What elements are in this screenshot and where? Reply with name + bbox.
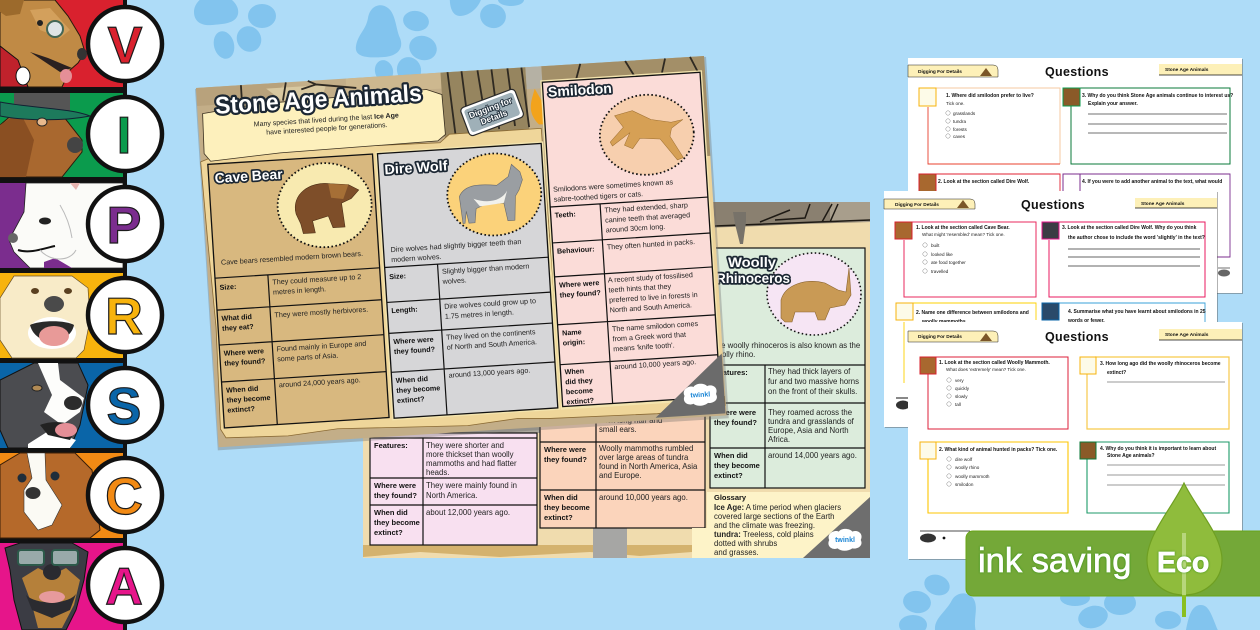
question 1 box: 1. Where did smilodon prefer to live? <box>946 93 1034 99</box>
panel: Smilodon: around 10,000 years ago. <box>614 357 696 371</box>
badge C <box>88 458 162 532</box>
panel: Smilodon: from a Greek word that <box>612 330 686 343</box>
panel: mammoth relative table: they become <box>374 518 420 527</box>
panel: Cave Bear: They could measure up to 2 <box>272 272 362 287</box>
panel: Dire Wolf: wolves. <box>441 275 467 286</box>
question 1 box: What does 'extremely' mean? Tick one. <box>946 367 1026 372</box>
panel: woolly mammoth table: and Europe. <box>599 471 641 480</box>
panel: Dire Wolf: Slightly bigger than modern <box>442 261 530 276</box>
worksheet 3 <box>908 322 1243 560</box>
dog P: white dog on purple <box>0 183 123 268</box>
panel: mammoth relative table: about 12,000 years ago. <box>426 508 510 517</box>
badge: Digging for Details: Details <box>479 107 509 127</box>
panel: woolly mammoth table: they become <box>544 503 590 512</box>
question 2 box <box>896 303 1036 383</box>
panel: mammoth relative table: mammoths and had flatter <box>426 459 517 468</box>
panel: mammoth relative table: Where were <box>374 481 416 490</box>
panel: mammoth relative table: Features: <box>374 441 408 450</box>
question 1 box: 1. Look at the section called Woolly Mammoth. <box>939 360 1050 366</box>
panel: woolly rhinoceros: tundra and grasslands of <box>768 417 855 426</box>
badge C: C <box>105 468 143 526</box>
dog I: bloodhound in hat on green <box>0 93 123 177</box>
letter badges <box>88 7 162 622</box>
panel: woolly mammoth table: found in North America, Asia <box>599 462 698 471</box>
corner with twinkl logo <box>652 354 725 418</box>
panel: Smilodon: teeth hints that they <box>608 282 672 294</box>
glossary: and grasses. <box>714 548 759 557</box>
question 1 box: caves <box>953 134 966 139</box>
back poster: mammoth and rhino page <box>363 202 870 558</box>
icon: rhino in circle <box>767 253 861 335</box>
panel: Cave Bear: Found mainly in Europe and <box>276 339 367 353</box>
heading: Questions: Questions <box>1045 330 1109 344</box>
panel: woolly rhinoceros: around 14,000 years ago. <box>768 451 857 460</box>
panel: Smilodon: they found? <box>559 288 601 300</box>
header pills: Digging For Details <box>918 69 962 75</box>
question 3 box: the author chose to include the word 'slightly' in the text? <box>1068 235 1205 241</box>
question 1 box: grasslands <box>953 111 976 116</box>
title banner <box>200 79 446 162</box>
corner with twinkl logo: twinkl <box>690 391 710 400</box>
panel: woolly rhinoceros: Where were <box>714 408 756 417</box>
panel: Cave Bear: they eat? <box>222 322 254 333</box>
panel: woolly rhinoceros: Africa. <box>768 435 790 444</box>
panel: woolly mammoth table <box>540 410 705 528</box>
panel: Smilodon: When <box>564 366 584 376</box>
panel: Dire Wolf: Length: <box>391 305 418 315</box>
panel: Smilodon: The name smilodon comes <box>612 319 699 333</box>
panel: woolly rhinoceros: They had thick layers of <box>768 367 851 376</box>
panel: mammoth relative table: extinct? <box>374 528 403 537</box>
heading: Stone Age Animals: Stone Age Animals <box>214 80 423 120</box>
panel: Cave Bear: they found? <box>224 356 266 368</box>
question 2 box: woolly rhino <box>955 465 980 470</box>
badge A <box>88 548 162 622</box>
panel: Smilodon: A recent study of fossilised <box>608 270 693 285</box>
question 3 box <box>1063 88 1233 164</box>
badge S: S <box>107 378 141 436</box>
question 3 box: extinct? <box>1107 370 1126 376</box>
glossary: and the climate was freezing. <box>714 521 815 530</box>
corner with twinkl logo: twinkl <box>835 537 855 544</box>
question 2 box: 2. Look at the section called Dire Wolf. <box>938 179 1030 185</box>
badge A: A <box>105 558 143 616</box>
panel: Dire Wolf: Where were <box>393 335 434 346</box>
question 2 box: 2. What kind of animal hunted in packs? Tick one. <box>939 447 1058 453</box>
panel: Smilodon: become <box>566 386 593 396</box>
panel: Smilodon: They often hunted in packs. <box>607 237 695 252</box>
heading: Dire Wolf: Dire Wolf <box>384 157 448 177</box>
panel: mammoth relative table: They were mainly found in <box>426 481 517 490</box>
panel: Dire Wolf: 1.75 metres in length. <box>445 307 514 321</box>
icon: wolf in circle <box>445 151 544 238</box>
question 4 box: Stone Age animals? <box>1107 453 1155 459</box>
panel: woolly rhinoceros: Features: <box>714 368 748 377</box>
panel: Smilodon: around 30cm long. <box>605 222 665 235</box>
panel: Smilodon: canine teeth that averaged <box>605 210 690 225</box>
question 1 box: very <box>955 378 964 383</box>
panel: woolly rhinoceros: they become <box>714 461 760 470</box>
badge I: I <box>117 107 131 165</box>
heading: Smilodon: Smilodon <box>547 80 612 100</box>
panel: woolly rhinoceros <box>710 248 865 488</box>
question 3 box: 3. How long ago did the woolly rhinoceros become <box>1100 361 1221 367</box>
question 1 box: travelled <box>931 269 949 274</box>
panel: Smilodon: Behaviour: <box>557 244 595 256</box>
panel: Smilodon: did they <box>565 376 593 386</box>
panel: Smilodon: extinct? <box>566 396 594 406</box>
glossary: covered large sections of the Earth <box>714 512 834 521</box>
question 4 box <box>1080 442 1229 513</box>
panel: Smilodon: Smilodons were sometimes known as <box>553 177 674 194</box>
header pills: Stone Age Animals <box>1165 67 1209 73</box>
panel: Smilodon: preferred to live in forests in <box>609 290 698 304</box>
panel: Dire Wolf <box>375 141 560 420</box>
question 2 box: dire wolf <box>955 457 973 462</box>
question 3 box: Explain your answer. <box>1088 101 1138 107</box>
question 3 box: 3. Look at the section called Dire Wolf. Why do you think <box>1062 225 1197 231</box>
panel: Dire Wolf: Dire wolves could grow up to <box>444 296 536 311</box>
panel: Cave Bear: They were mostly herbivores. <box>274 305 368 320</box>
heading: Cave Bear: Cave Bear <box>214 166 284 186</box>
header pills <box>884 198 1217 209</box>
badge P: P <box>107 197 141 255</box>
dog V: terrier with glasses on red <box>0 0 123 87</box>
panel: mammoth relative table: They were shorter and <box>426 441 504 450</box>
dog C: spaniel on orange <box>0 453 123 538</box>
panel: Smilodon: means 'knife tooth'. <box>613 340 675 353</box>
worksheet 2 <box>884 191 1218 428</box>
panel: Cave Bear: metres in length. <box>273 284 326 297</box>
question 4 box <box>1042 303 1206 324</box>
panel: Smilodon: sabre-toothed tigers or cats. <box>553 189 643 204</box>
panel: woolly mammoth table: When did <box>544 493 578 502</box>
panel: Smilodon: Where were <box>559 278 600 290</box>
question 2 box: woolly mammoth <box>955 474 990 479</box>
panel: mammoth relative table: North America. <box>426 491 478 500</box>
question 1 box <box>919 88 1060 164</box>
left strip: VIPRSCA dog characters <box>0 0 126 630</box>
panel: Cave Bear: they become <box>226 393 271 405</box>
badge: Digging for Details <box>460 88 525 137</box>
question 2 box <box>920 442 1068 513</box>
panel: woolly rhinoceros: Europe, Asia and North <box>768 426 849 435</box>
panel: Cave Bear: extinct? <box>227 404 255 415</box>
panel: Smilodon: Teeth: <box>554 209 576 220</box>
panel: mammoth relative table: When did <box>374 508 408 517</box>
icon: sabre-toothed cat in circle <box>597 92 696 178</box>
panel: woolly rhinoceros: They roamed across the <box>768 408 852 417</box>
dog S: border collie on blue <box>0 363 123 448</box>
panel: Smilodon <box>540 70 723 410</box>
panel: Cave Bear: some parts of Asia. <box>277 351 338 363</box>
question 1 box: slowly <box>955 394 968 399</box>
parchment backing <box>200 118 725 441</box>
panel: Cave Bear <box>208 154 389 428</box>
question 1 box: tundra <box>953 119 966 124</box>
question 2 box: woolly mammoths. <box>921 319 968 325</box>
question 1 box: looked like <box>931 252 953 257</box>
twinkl logo <box>896 398 910 410</box>
dog R: golden retriever on yellow <box>0 273 123 358</box>
question 4 box: 4. If you were to add another animal to the text, what would <box>1082 179 1222 185</box>
question 3 box <box>1042 222 1205 297</box>
panel: Smilodon: They had extended, sharp <box>604 200 688 215</box>
panel: Dire Wolf: they become <box>396 383 441 395</box>
question 1 box: 1. Look at the section called Cave Bear. <box>916 225 1010 231</box>
panel: Dire Wolf: modern wolves. <box>391 252 442 264</box>
panel: woolly rhinoceros: fur and two massive horns <box>768 377 859 386</box>
panel: woolly mammoth table: extinct? <box>544 513 573 522</box>
question 2 box <box>919 174 1060 230</box>
front poster: Stone Age Animals <box>195 56 729 450</box>
question 1 box: Tick one. <box>946 101 964 106</box>
panel: woolly rhinoceros: woolly rhino. <box>711 350 755 359</box>
vertical black line <box>123 0 127 630</box>
text: Eco: Eco <box>1157 547 1209 579</box>
panel: Dire Wolf: When did <box>395 374 428 385</box>
heading: Woolly Rhinoceros <box>716 254 790 286</box>
panel: mammoth relative table: more thickset than woolly <box>426 450 514 459</box>
question 3 box: 3. Why do you think Stone Age animals continue to interest us? <box>1082 93 1233 99</box>
panel: woolly rhinoceros: on the front of their skulls. <box>768 387 857 396</box>
panel: Cave Bear: Cave bears resembled modern brown bears. <box>221 249 363 267</box>
question 4 box: words or fewer. <box>1067 318 1105 324</box>
panel: woolly rhinoceros: they found? <box>714 418 757 427</box>
question 2 box: 2. Name one difference between smilodons and <box>916 310 1029 316</box>
heading: Woolly Rhinoceros: Rhinoceros <box>716 270 790 286</box>
panel: woolly mammoth table: thick long hair and <box>599 416 662 425</box>
panel: Dire Wolf: of North and South America. <box>446 337 537 352</box>
question 1 box <box>920 357 1068 429</box>
dog A: rottweiler with glasses on pink <box>0 543 123 630</box>
cave rock band <box>700 202 870 244</box>
header pills: Digging For Details <box>918 334 962 340</box>
panel: Cave Bear: Where were <box>223 346 264 358</box>
panel: woolly mammoth table: around 10,000 years ago. <box>599 493 688 502</box>
panel: Cave Bear: Size: <box>219 282 237 292</box>
panel: Cave Bear: around 24,000 years ago. <box>279 375 361 389</box>
question 1 box: tall <box>955 402 961 407</box>
glossary: dotted with shrubs <box>714 539 777 548</box>
panel: woolly rhinoceros: The woolly rhinoceros is also known as the <box>712 341 860 350</box>
intro text <box>254 112 400 137</box>
badge R: R <box>105 288 143 346</box>
question 1 box: ate food together <box>931 260 966 265</box>
flames <box>530 88 545 125</box>
glossary: tundra: Treeless, cold plains <box>714 530 814 539</box>
eco ink saving banner <box>966 483 1260 617</box>
panel: woolly mammoth table: over large areas of tundra <box>599 453 689 462</box>
panel: mammoth relative table: heads. <box>426 468 449 477</box>
header pills <box>908 64 1242 77</box>
panel: Smilodon: Name <box>562 327 582 337</box>
cave rock texture <box>196 56 710 188</box>
panel: mammoth relative table <box>370 433 537 545</box>
panel: Cave Bear: When did <box>226 384 259 395</box>
heading: Questions: Questions <box>1045 65 1109 79</box>
badge V: V <box>108 17 143 75</box>
intro text: Many species that lived during the last Ice Age <box>254 112 399 128</box>
question 4 box <box>1063 174 1230 257</box>
panel: Dire Wolf: extinct? <box>397 394 425 405</box>
glossary: Glossary <box>714 493 747 502</box>
panel: woolly mammoth table: they found? <box>544 455 587 464</box>
question 4 box: 4. Why do you think it is important to learn about <box>1100 446 1216 452</box>
intro text: have interested people for generations. <box>266 122 388 137</box>
panel: woolly rhinoceros: extinct? <box>714 471 743 480</box>
question 4 box: 4. Summarise what you have learnt about smilodons in 25 <box>1068 309 1206 315</box>
panel: woolly mammoth table: small ears. <box>599 425 637 434</box>
glossary: Ice Age: A time period when glaciers <box>714 503 841 512</box>
twinkl logo <box>920 531 970 542</box>
panel: Smilodon: origin: <box>562 337 585 347</box>
badge: Digging for Details: Digging for <box>467 95 514 120</box>
panel: woolly mammoth table: Where were <box>544 445 586 454</box>
icon: leaf <box>1147 483 1222 617</box>
header pills: Stone Age Animals <box>1141 201 1185 207</box>
question 1 box: quickly <box>955 386 970 391</box>
badge V <box>88 7 162 81</box>
panel: woolly rhinoceros: When did <box>714 451 748 460</box>
question 1 box: forests <box>953 127 967 132</box>
question 2 box: smilodon <box>955 482 974 487</box>
panel: Dire Wolf: they found? <box>394 345 435 356</box>
panel: woolly mammoth table: Woolly mammoths rumbled <box>599 444 693 453</box>
panel: mammoth relative table: they found? <box>374 491 417 500</box>
question 1 box: built <box>931 243 940 248</box>
panel: Dire Wolf: around 13,000 years ago. <box>448 366 531 380</box>
panel: Dire Wolf: Size: <box>389 271 406 281</box>
heading: Questions: Questions <box>1021 198 1085 212</box>
panel: Dire Wolf: They lived on the continents <box>446 327 536 342</box>
header pills: Stone Age Animals <box>1165 332 1209 338</box>
twinkl logo <box>1218 268 1230 276</box>
question 3 box <box>1080 357 1229 429</box>
badge S <box>88 368 162 442</box>
glossary <box>692 492 870 558</box>
question 1 box <box>895 222 1036 297</box>
heading: Woolly Rhinoceros: Woolly <box>728 254 776 270</box>
question 1 box: What might 'resembled' mean? Tick one. <box>922 232 1005 237</box>
badge P <box>88 187 162 261</box>
text: ink saving: ink saving <box>978 542 1131 580</box>
badge R <box>88 278 162 352</box>
icon: bear in circle <box>275 160 374 250</box>
panel: Cave Bear: What did <box>221 312 252 323</box>
panel: Dire Wolf: Dire wolves had slightly bigger teeth than <box>390 237 522 254</box>
header pills <box>908 329 1242 342</box>
header pills: Digging For Details <box>895 202 939 208</box>
badge I <box>88 97 162 171</box>
worksheet 1 <box>908 58 1243 294</box>
panel: Smilodon: North and South America. <box>609 300 692 314</box>
corner with twinkl logo <box>803 497 870 558</box>
